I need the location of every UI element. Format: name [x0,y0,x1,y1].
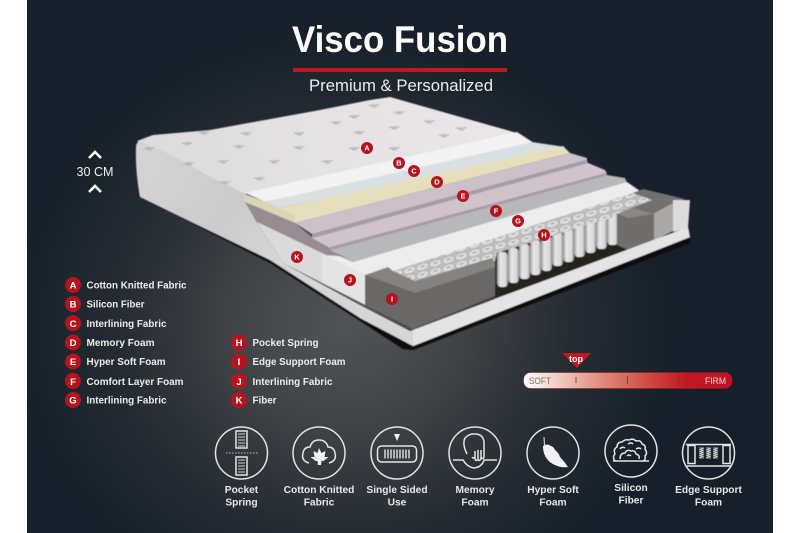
memory foam front edge [245,195,295,223]
layer E: hyper soft foam upper [295,153,587,234]
front edge support block I [365,258,495,293]
top marker: top [569,354,583,364]
icon label: cotton knitted fabric: Fabric [304,498,335,508]
base strip front [413,227,690,346]
legend column A to G [65,277,187,408]
icon label: hyper soft foam: Foam [539,498,567,508]
icon: single sided use [371,427,423,479]
firmness scale: FIRM [705,376,726,386]
legend column A to G: Interlining Fabric [86,318,167,330]
legend column A to G: Comfort Layer Foam [86,376,184,388]
icon label: memory foam: Foam [461,498,489,508]
icon: edge support foam [682,427,734,479]
pocket spring top [393,193,653,282]
icon: pocket spring [216,427,268,479]
right edge support block [617,208,654,250]
right white side [673,200,690,232]
hyper soft groove [312,160,588,238]
icon label: single sided use: Single Sided [366,485,428,496]
scale labels: SOFT [529,376,551,386]
mattress cutaway illustration [136,97,690,350]
title underline [293,68,507,72]
icon label: cotton knitted fabric: Cotton Knitted [284,485,354,496]
legend column A to G: A [70,280,77,292]
icon label: hyper soft foam: Hyper Soft [527,485,579,496]
legend column A to G: B [70,300,77,310]
height indicator: 30 CM [76,152,114,192]
legend column A to G: G [69,396,77,406]
hotspot markers A to K: F [494,207,499,216]
hotspot markers A to K [291,142,550,305]
legend column A to G: Interlining Fabric [86,394,167,406]
dark spring floor [495,241,630,301]
block front faces [365,267,495,329]
icon: memory foam [449,427,501,479]
pocket spring columns [497,213,618,287]
layer front band: purple edge [245,202,340,256]
hotspot markers A to K: C [411,167,417,176]
hotspot markers A to K: I [391,295,393,304]
quilting tufts [143,103,467,185]
layer E: hyper soft foam lower [312,163,607,248]
layer F: comfort layer foam [330,175,627,262]
shadow under mattress [138,190,690,350]
icon label: pocket spring: Spring [225,498,258,508]
legend column A to G: D [70,338,77,349]
icon label: silicon fiber: Fiber [619,496,643,506]
gradient bar [524,372,732,388]
subtitle: Premium & Personalized [309,77,493,95]
base strip [360,227,690,346]
legend column A to G: E [70,357,76,368]
legend column A to G: F [70,377,76,388]
hotspot markers A to K: G [515,217,521,226]
icon label: single sided use: Use [388,498,407,508]
legend column A to G: Cotton Knitted Fabric [86,280,187,292]
legend column H to K: H [236,338,243,349]
layer C: pale blue interlining [265,142,565,208]
legend column H to K: Pocket Spring [252,337,318,349]
legend column H to K [231,334,346,408]
title: Visco Fusion [292,19,508,60]
icon label: memory foam: Memory [455,485,495,496]
icon label: edge support foam: Foam [695,498,722,508]
quilted top surface [137,97,517,194]
legend column H to K: Edge Support Foam [252,356,346,368]
height indicator: 30 CM: 30 CM [76,165,114,179]
legend column A to G: Hyper Soft Foam [86,356,166,368]
top marker [562,353,591,368]
hotspot markers A to K: J [348,276,352,285]
hotspot markers A to K: B [396,159,402,168]
icon: hyper soft feather [527,427,579,479]
layer B: white silicon fiber strip [245,132,537,202]
mattress side face [136,140,413,346]
legend column A to G: Silicon Fiber [86,298,144,310]
hotspot markers A to K: A [364,144,370,153]
icon: cotton [293,427,345,479]
back edge support foam [617,189,685,241]
right block top [617,208,654,218]
icon label: silicon fiber: Silicon [614,483,648,494]
icon label: pocket spring: Pocket [225,485,258,496]
legend column H to K: K [236,396,243,406]
panel J: interlining fabric [322,253,365,305]
hotspot markers A to K: H [541,231,547,240]
icon: silicon fiber [605,425,657,477]
hotspot markers A to K: D [434,178,440,187]
back edge inner face [653,203,673,241]
icon label: edge support foam: Edge Support [675,485,742,496]
legend column H to K: J [236,377,242,388]
legend column A to G: Memory Foam [86,337,154,349]
hyper soft lower groove [330,173,607,250]
panel K: fiber [257,222,322,283]
legend column H to K: I [238,357,240,368]
layer D: memory foam [245,146,570,223]
hotspot markers A to K: E [460,192,466,201]
hotspot markers A to K: K [294,253,300,262]
legend column H to K: Fiber [252,394,276,406]
firmness scale [524,353,732,388]
layer G: white interlining [322,182,640,275]
legend column H to K: Interlining Fabric [252,376,333,388]
legend column A to G: C [70,319,77,330]
